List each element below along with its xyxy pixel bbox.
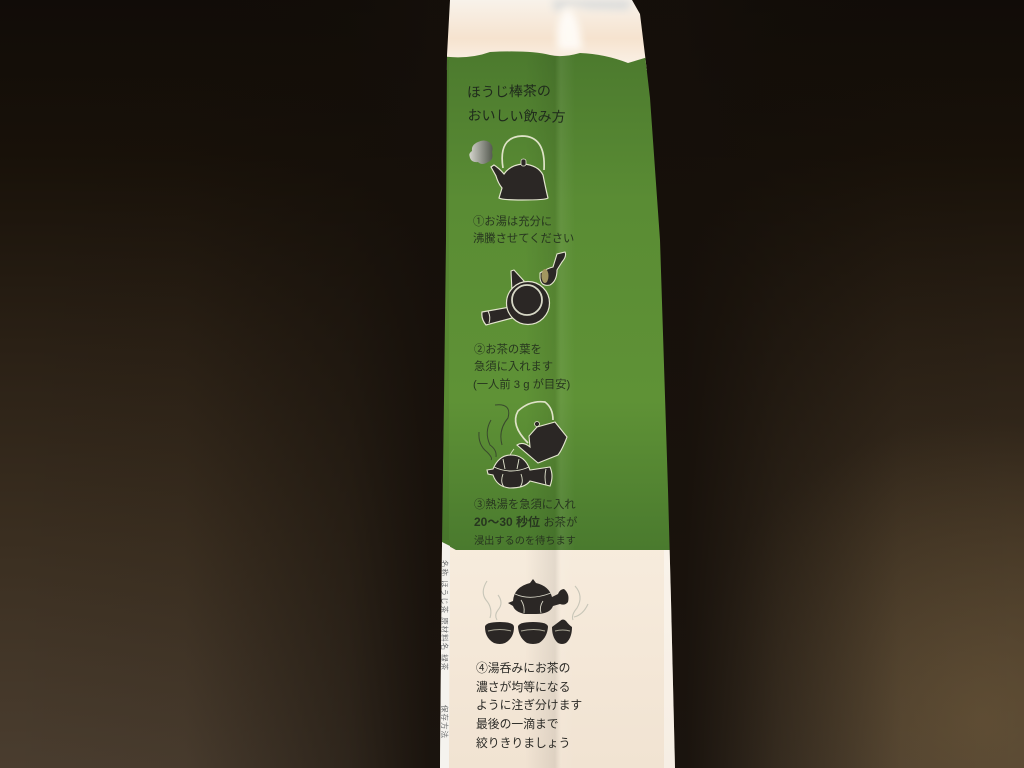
text: step 1: 沸騰させてください (473, 231, 574, 245)
panel: white lower area (440, 541, 680, 768)
icon: pouring tea into three cups (483, 579, 588, 644)
text: step 4: ように注ぎ分けます (476, 698, 582, 712)
side seam strip with small print: 名称 ほうじ茶 原材料名 緑茶 (440, 560, 450, 671)
icon: kyusu teapot with tea scoop (482, 252, 566, 325)
text: step 4: 濃さが均等になる (476, 680, 570, 694)
icon: pouring kettle into teapot (479, 402, 567, 488)
panel: white top seal (446, 0, 647, 70)
text: step 2: ②お茶の葉を (474, 342, 542, 356)
vertical fold shading (538, 55, 566, 768)
text: step 4: ④湯呑みにお茶の (476, 661, 570, 675)
title (467, 82, 566, 126)
side seam strip with small print: 保存方法 (440, 705, 450, 739)
title: ほうじ棒茶の (467, 83, 551, 100)
text: step 1 (473, 215, 574, 245)
text: step 4: 絞りきりましょう (476, 736, 570, 750)
text: step 3: 20～30 秒位 お茶が (474, 514, 577, 529)
tea package (440, 0, 680, 768)
side seam strip with small print (440, 541, 450, 768)
text: step 3 (474, 497, 577, 547)
title: おいしい飲み方 (467, 107, 566, 125)
panel: green instruction area (440, 51, 680, 550)
text: step 2: (一人前 3 g が目安) (473, 377, 571, 391)
text: step 2: 急須に入れます (474, 359, 553, 373)
text: step 1: ①お湯は充分に (473, 215, 552, 228)
text: step 2 (473, 342, 571, 391)
text: step 4: 最後の一滴まで (476, 717, 559, 731)
text: step 3: ③熱湯を急須に入れ (474, 497, 576, 511)
text: step 3: 浸出するのを待ちます (474, 534, 576, 547)
icon: kettle with steam cloud (469, 136, 548, 200)
text: step 4 (476, 661, 582, 750)
